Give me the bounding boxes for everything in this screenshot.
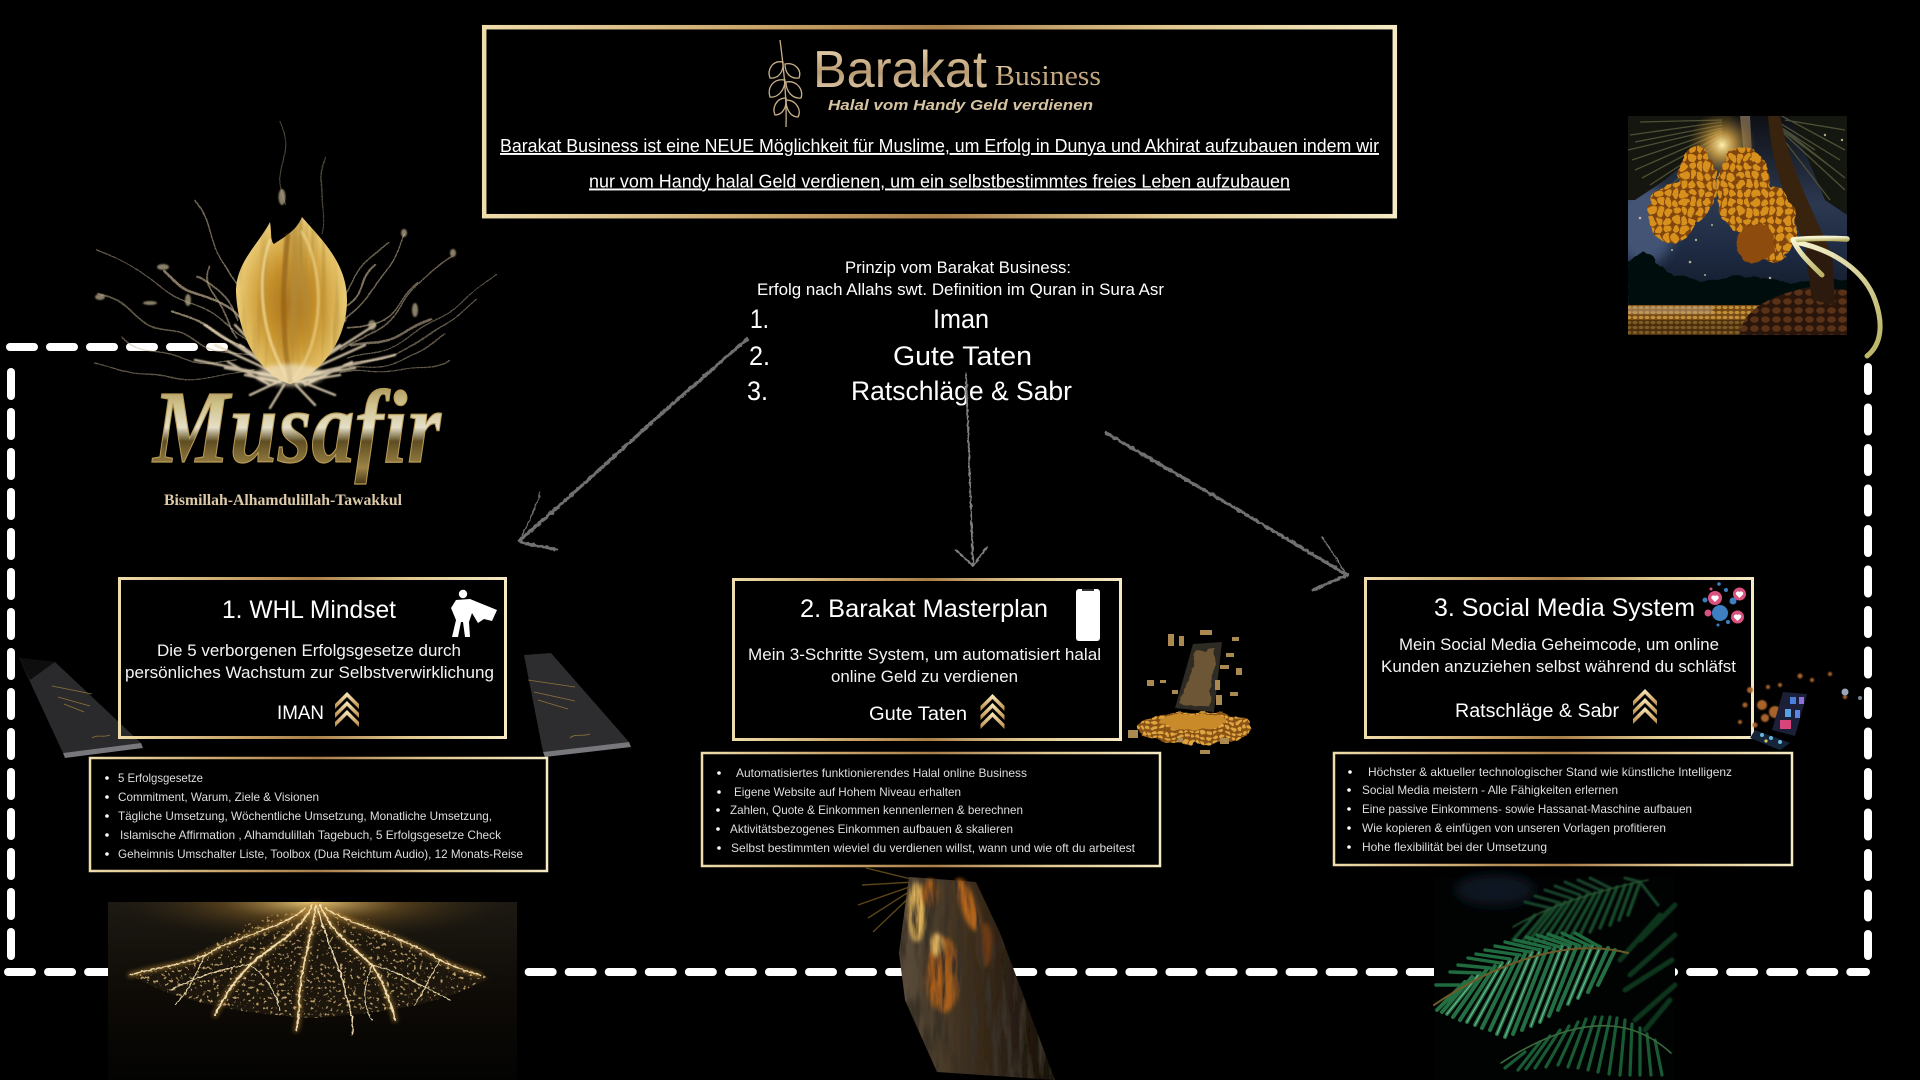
frond: right shadow [1620, 905, 1675, 1030]
bullet list: Commitment, Warum, Ziele & Visionen [118, 790, 319, 804]
pillar label: IMAN [277, 703, 324, 724]
image: palm trunk [858, 868, 1055, 1080]
panel: Barakat Masterplan card [734, 580, 1120, 740]
bullet list: Islamische Affirmation , Alhamdulillah Tagebuch, 5 Erfolgsgesetze Check [120, 828, 502, 842]
heading: 3. Social Media System [1434, 594, 1695, 622]
image: date palm photo [1615, 111, 1847, 335]
heading: 2. Barakat Masterplan [800, 595, 1048, 623]
canopy [1628, 121, 1707, 200]
bullet list [105, 771, 523, 861]
intro text: Barakat Business ist eine NEUE Möglichkeit für Muslime, um Erfolg in Dunya und Akhirat aufzubauen indem wir [500, 136, 1379, 156]
description: Die 5 verborgenen Erfolgsgesetze durch [157, 641, 461, 660]
bullet list: Höchster & aktueller technologischer Stand wie künstliche Intelligenz [1368, 765, 1732, 779]
bullet list: Selbst bestimmten wieviel du verdienen willst, wann und wie oft du arbeitest [731, 841, 1136, 855]
bullet list: Social Media meistern - Alle Fähigkeiten erlernen [1362, 783, 1618, 797]
bullet list [1347, 765, 1732, 854]
bullet list: Eigene Website auf Hohem Niveau erhalten [734, 785, 961, 799]
tree line [1628, 250, 1847, 310]
panel: Social Media System details [1334, 753, 1792, 865]
description [748, 645, 1101, 686]
bullet list: Aktivitätsbezogenes Einkommen aufbauen & skalieren [730, 822, 1013, 836]
intro text: nur vom Handy halal Geld verdienen, um ein selbstbestimmtes freies Leben aufzubauen [589, 172, 1290, 192]
arrow: to Social Media System [1106, 433, 1347, 590]
description: online Geld zu verdienen [831, 667, 1018, 686]
image: glowing roots [108, 902, 517, 1080]
logo subword: Business [995, 61, 1101, 92]
bullet list: Wie kopieren & einfügen von unseren Vorlagen profitieren [1362, 821, 1666, 835]
intro text [500, 136, 1379, 192]
description: Mein 3-Schritte System, um automatisiert halal [748, 645, 1101, 664]
logo slogan: Halal vom Handy Geld verdienen [828, 97, 1093, 114]
principle list: 1. [750, 304, 769, 334]
palm trunk [1768, 116, 1830, 250]
bullet list: Hohe flexibilität bei der Umsetzung [1362, 840, 1547, 854]
image: social phone [1738, 672, 1862, 750]
tagline: Bismillah-Alhamdulillah-Tawakkul [164, 492, 403, 509]
panel: Social Media System card [1366, 578, 1752, 738]
panel: header [484, 27, 1395, 216]
image: left book [19, 658, 143, 758]
icon: chevrons [1633, 689, 1657, 724]
icon: date branch [769, 40, 802, 127]
description: Mein Social Media Geheimcode, um online [1399, 635, 1719, 654]
date clusters [1649, 146, 1796, 263]
description [125, 641, 494, 682]
principle list: Gute Taten [893, 341, 1032, 371]
bullet list: Tägliche Umsetzung, Wöchentliche Umsetzung, Monatliche Umsetzung, [118, 809, 492, 823]
icon: chevrons [980, 694, 1004, 729]
principle list: Ratschläge & Sabr [851, 376, 1072, 406]
principle list [747, 304, 1072, 406]
heading: 1. WHL Mindset [222, 596, 396, 624]
principle text [757, 259, 1165, 299]
image: palm leaves [1434, 874, 1675, 1080]
pillar label: Ratschläge & Sabr [1455, 701, 1620, 722]
principle text: Prinzip vom Barakat Business: [845, 259, 1071, 277]
icon: smartphone [1076, 589, 1100, 641]
panel: WHL Mindset details [90, 758, 547, 871]
bullet list: Eine passive Einkommens- sowie Hassanat-Maschine aufbauen [1362, 802, 1692, 816]
dashed frame [8, 347, 1868, 972]
logo wordmark: Barakat [813, 41, 988, 99]
panel: Barakat Masterplan details [702, 753, 1160, 866]
panel: WHL Mindset card [120, 578, 506, 738]
bullet list: Geheimnis Umschalter Liste, Toolbox (Dua Reichtum Audio), 12 Monats-Reise [118, 847, 523, 861]
arrow: to Barakat Masterplan [956, 373, 987, 566]
image: golden seed with splash [94, 123, 496, 408]
icon: social reactions [1702, 582, 1746, 626]
ground [1628, 305, 1760, 335]
icon: chevrons [335, 692, 359, 727]
description: persönliches Wachstum zur Selbstverwirklichung [125, 663, 494, 682]
logo: Musafir wordmark: Musafir [151, 370, 442, 485]
principle list: 2. [749, 341, 770, 371]
description: Kunden anzuziehen selbst während du schläfst [1381, 657, 1736, 676]
arrow: to WHL Mindset [519, 339, 747, 550]
bullet list: 5 Erfolgsgesetze [118, 771, 203, 785]
principle list: 3. [747, 376, 768, 406]
bullet list: Automatisiertes funktionierendes Halal online Business [736, 766, 1027, 780]
icon: superhero [451, 590, 497, 637]
image: right book [524, 653, 631, 757]
principle list: Iman [933, 304, 989, 334]
frond: main [1434, 933, 1628, 1037]
sparks [1639, 134, 1843, 279]
arrow: curved to date palm [1793, 238, 1880, 356]
pillar label: Gute Taten [869, 704, 967, 725]
description [1381, 635, 1736, 676]
image: phone in gold pile [1128, 630, 1253, 754]
bullet list: Zahlen, Quote & Einkommen kennenlernen & berechnen [730, 803, 1023, 817]
frond: top [1513, 878, 1658, 942]
principle text: Erfolg nach Allahs swt. Definition im Quran in Sura Asr [757, 281, 1165, 299]
bullet list [716, 766, 1136, 855]
frond: bottom [1501, 1017, 1671, 1075]
